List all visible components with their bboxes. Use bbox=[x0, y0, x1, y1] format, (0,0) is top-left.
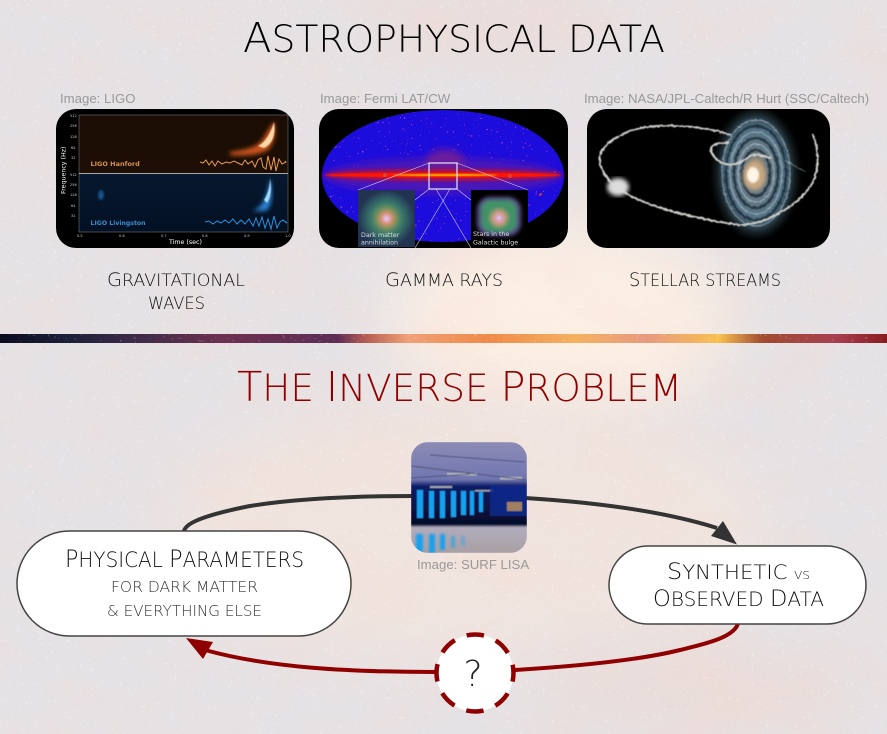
image credit: LIGO: Image: LIGO bbox=[60, 91, 136, 106]
image: supercomputer room bbox=[411, 442, 527, 553]
Hanford spectrogram bbox=[79, 115, 288, 173]
arrow: question to parameters bbox=[186, 638, 436, 672]
frequency tick labels: 512 bbox=[70, 173, 77, 177]
spiral galaxy bbox=[716, 111, 796, 235]
node: physical parameters bbox=[17, 531, 351, 636]
image credit: SURF LISA: Image: SURF LISA bbox=[417, 557, 529, 572]
image credit: NASA: Image: NASA/JPL-Caltech/R Hurt (SSC/Caltech) bbox=[584, 91, 869, 106]
frequency tick labels: 64 bbox=[71, 146, 76, 150]
node: physical parameters: & EVERYTHING ELSE bbox=[107, 602, 262, 620]
frequency tick labels: 32 bbox=[71, 156, 75, 160]
inset: stars in the galactic bulge: Galactic bulge bbox=[473, 240, 518, 246]
time tick labels: 0.5 bbox=[77, 234, 83, 238]
caption: gravitational waves: GRAVITATIONAL bbox=[107, 269, 245, 291]
node: synthetic vs observed data: SYNTHETIC VS bbox=[667, 560, 810, 585]
all-sky ellipse bbox=[322, 110, 564, 242]
frequency tick labels: 32 bbox=[71, 214, 75, 218]
inset: stars in the galactic bulge bbox=[471, 190, 528, 247]
node: physical parameters: PHYSICAL PARAMETERS bbox=[65, 545, 304, 573]
frequency tick labels: 256 bbox=[70, 183, 77, 187]
divider strip: milky way band bbox=[0, 334, 887, 343]
arrow: data back to question bbox=[515, 623, 738, 670]
time tick labels: 0.9 bbox=[244, 234, 250, 238]
satellite galaxy blob bbox=[607, 178, 629, 196]
node: question mark: ? bbox=[463, 654, 483, 695]
frequency tick labels: 256 bbox=[70, 124, 77, 128]
frequency tick labels: 128 bbox=[70, 135, 77, 139]
node: synthetic vs observed data: OBSERVED DATA bbox=[653, 587, 824, 612]
panel: gravitational wave spectrograms bbox=[56, 109, 294, 248]
frequency tick labels: 128 bbox=[70, 193, 77, 197]
frequency tick labels: 512 bbox=[70, 114, 77, 118]
inset: stars in the galactic bulge: Stars in the bbox=[473, 231, 509, 238]
caption: stellar streams: STELLAR STREAMS bbox=[629, 269, 781, 291]
zoom box and guide lines bbox=[358, 163, 528, 248]
time tick labels: 0.8 bbox=[202, 234, 208, 238]
frequency tick labels: 64 bbox=[71, 204, 76, 208]
arrow: parameters to simulation bbox=[184, 496, 415, 531]
x axis label: Time (sec) bbox=[168, 239, 202, 246]
panel: stellar streams galaxy bbox=[587, 109, 830, 248]
caption: gravitational waves: WAVES bbox=[148, 294, 205, 314]
inset: dark matter annihilation: annihilation bbox=[361, 240, 398, 246]
image credit: Fermi: Image: Fermi LAT/CW bbox=[320, 91, 451, 106]
title: astrophysical data: ASTROPHYSICAL DATA bbox=[243, 14, 665, 62]
frequency tick labels bbox=[70, 114, 77, 218]
panel: gamma ray sky map bbox=[319, 109, 568, 248]
y axis label: Frequency (Hz) bbox=[60, 146, 68, 194]
label: LIGO Hanford: LIGO Hanford bbox=[90, 160, 140, 168]
arrow: simulation to synthetic data bbox=[525, 498, 737, 544]
caption: gamma rays: GAMMA RAYS bbox=[385, 269, 503, 291]
label: LIGO Livingston: LIGO Livingston bbox=[90, 220, 146, 227]
Livingston spectrogram bbox=[79, 174, 288, 232]
heading: the inverse problem: THE INVERSE PROBLEM bbox=[237, 363, 682, 411]
node: question mark bbox=[436, 634, 514, 712]
time tick labels: 0.7 bbox=[161, 234, 167, 238]
time tick labels bbox=[77, 234, 290, 237]
inset: dark matter annihilation bbox=[358, 190, 415, 247]
stellar stream bbox=[600, 126, 818, 225]
node: physical parameters: FOR DARK MATTER bbox=[111, 578, 258, 596]
inset: dark matter annihilation: Dark matter bbox=[361, 232, 400, 239]
time tick labels: 1.0 bbox=[285, 234, 291, 238]
caption: gravitational waves bbox=[107, 269, 245, 314]
time tick labels: 0.6 bbox=[119, 234, 125, 238]
node: synthetic vs observed data bbox=[609, 546, 866, 624]
